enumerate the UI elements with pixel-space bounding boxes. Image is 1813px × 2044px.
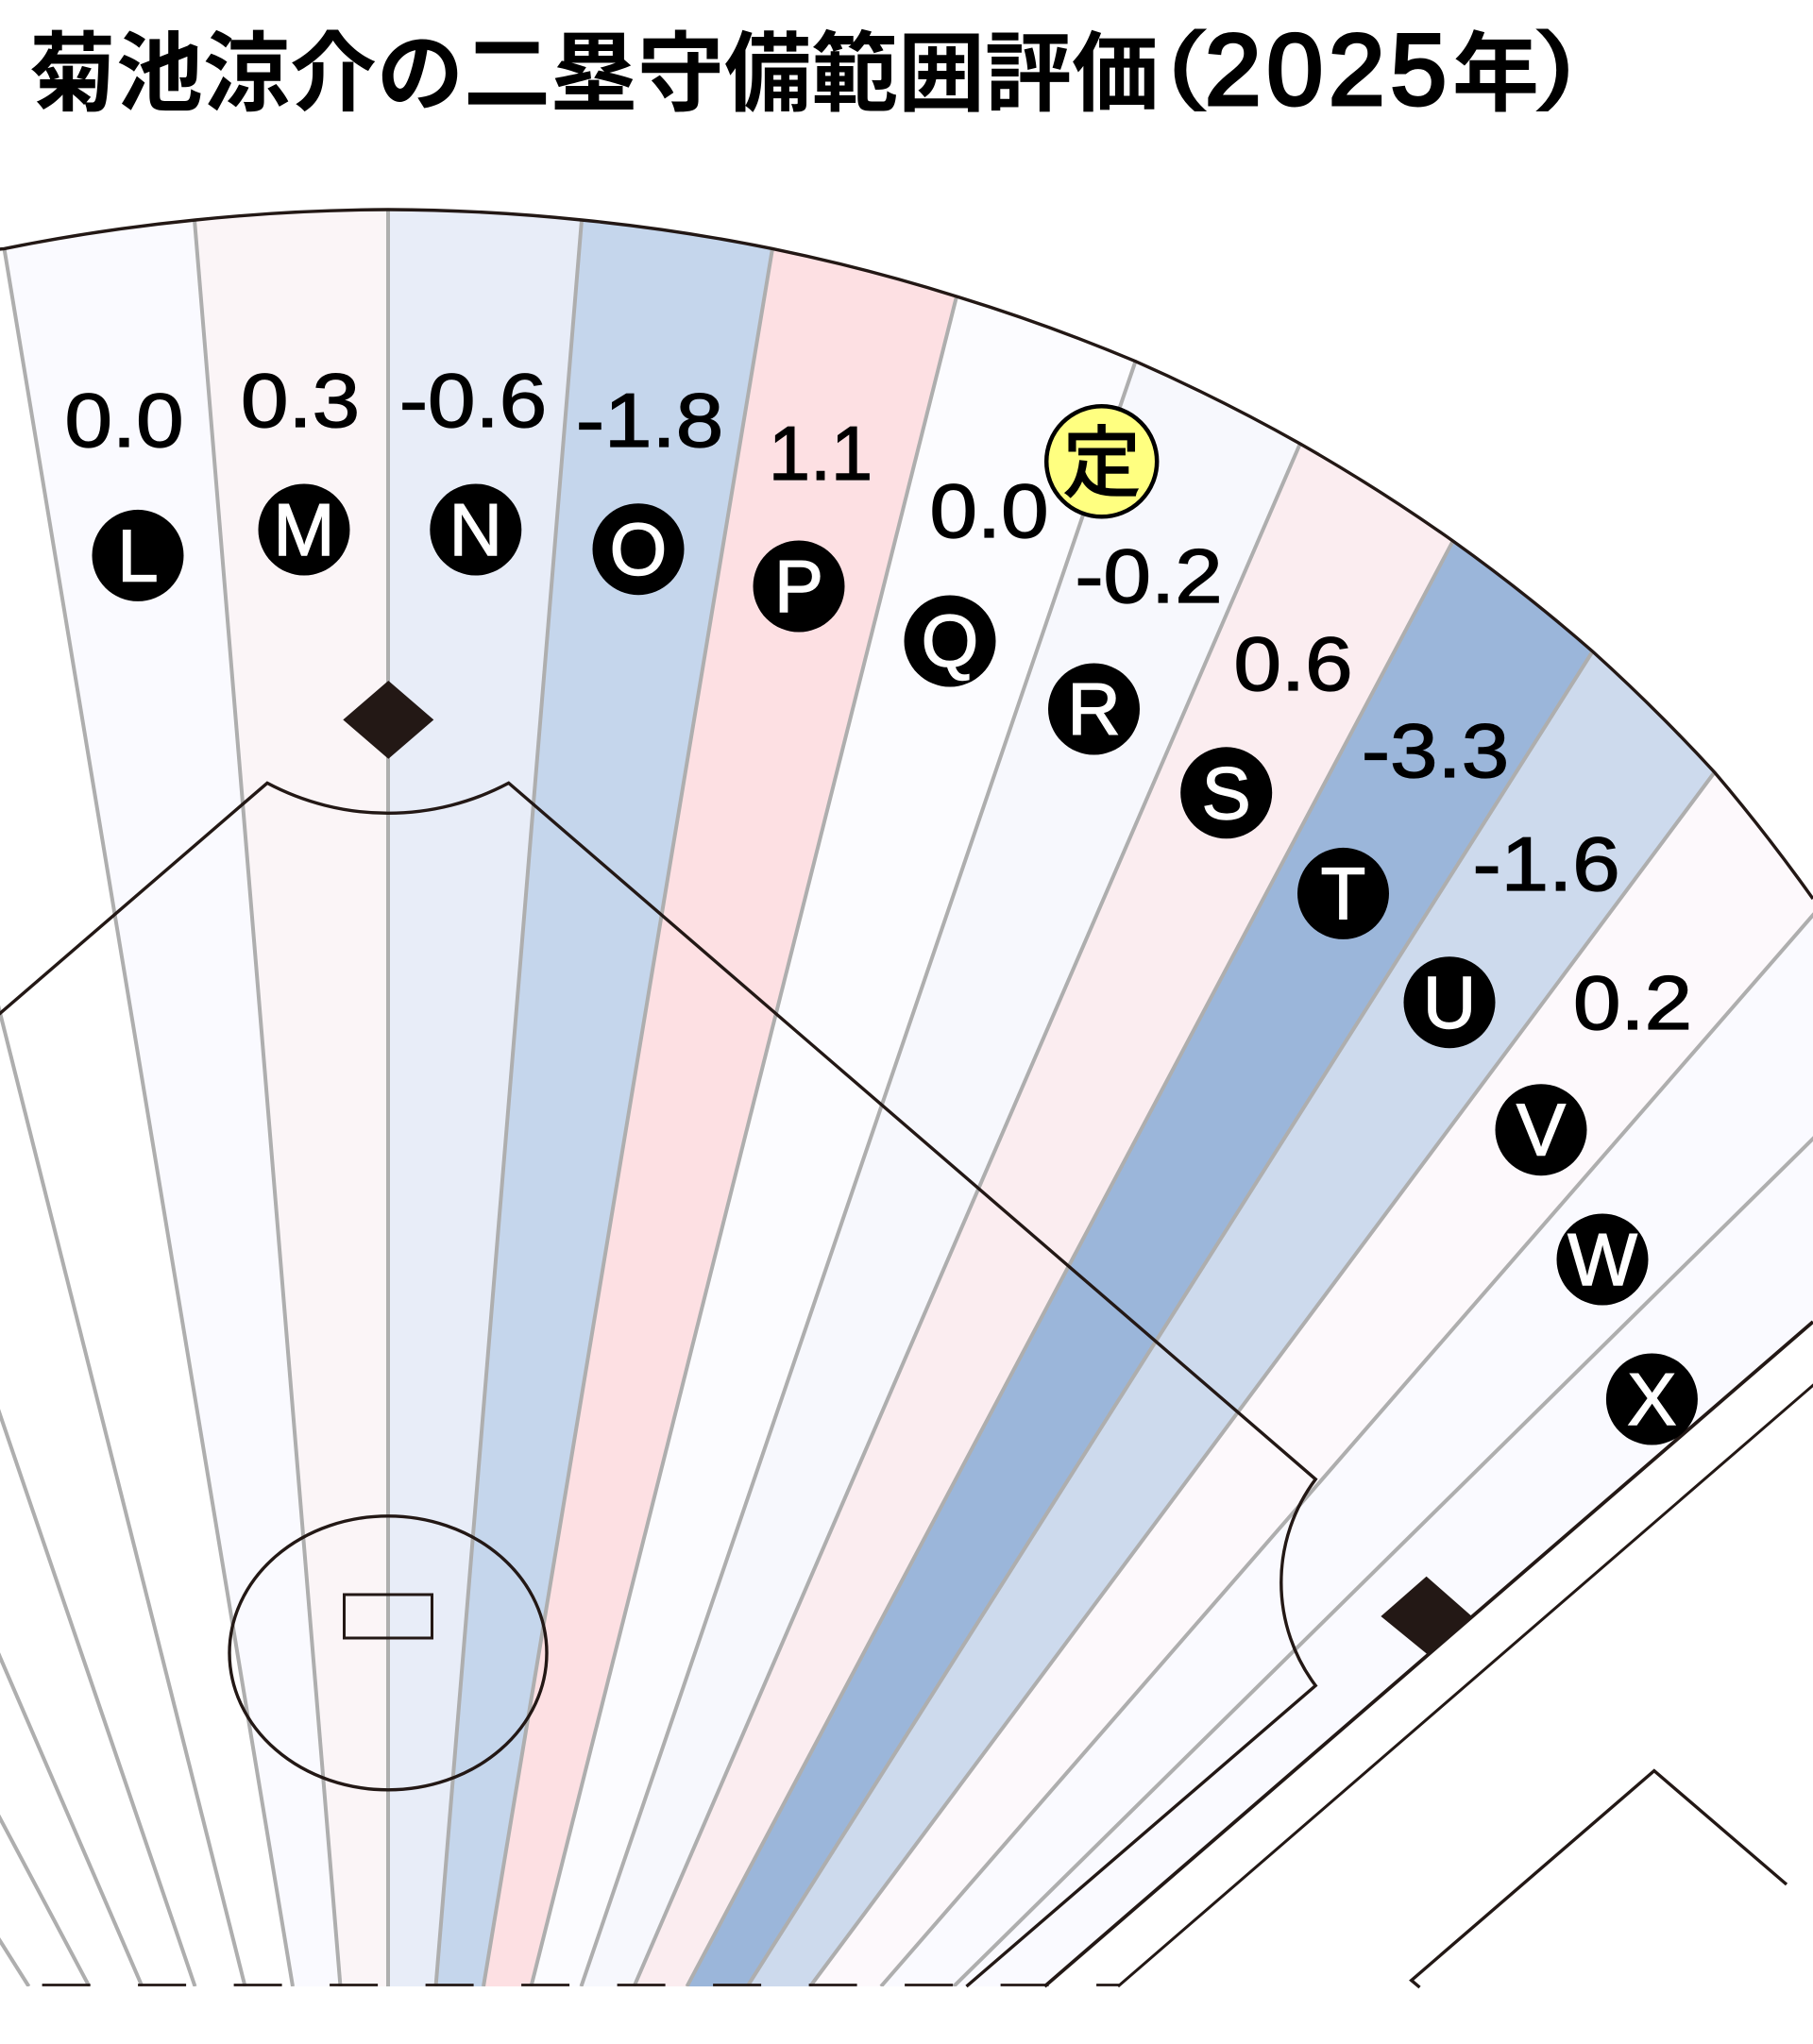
title [29,13,1574,127]
title: 菊池涼介の二塁守備範囲評価 [29,26,1159,123]
badge X [1606,1354,1698,1444]
zone T fill [689,544,1590,1986]
badge P [754,540,844,633]
right field bag marker [1381,1577,1472,1656]
zone M fill [196,211,386,1986]
badge M [259,483,349,576]
zone N value: -0.6 [399,358,547,444]
zone S fill [637,447,1450,1986]
zone N fill [390,211,580,1986]
badge Q: Q [922,600,978,683]
zone R value: -0.2 [1075,533,1223,619]
badge O: O [610,508,667,591]
badge V: V [1516,1089,1566,1172]
zone P fill [485,251,954,1986]
badge N: N [449,488,502,571]
badge P: P [774,545,823,628]
zone T value: -3.3 [1362,708,1509,794]
badge N [430,483,521,576]
zone O value: -1.8 [576,378,723,464]
zone L value: 0.0 [64,378,184,464]
title: ) [1537,15,1574,111]
outfield fence arc [0,210,1813,899]
badge X: X [1627,1358,1676,1441]
second base marker [343,681,433,759]
badge V [1496,1084,1586,1175]
outer foul line [1118,1381,1813,1986]
zone U fill [750,654,1713,1986]
title: 2025 [1205,13,1452,127]
zone X fill [954,94,1813,1986]
zone V fill [810,94,1813,1986]
badge W: W [1567,1218,1637,1301]
zone W fill [881,94,1813,1986]
badge U [1403,956,1496,1048]
zone U value: -1.6 [1472,821,1620,907]
badge S [1180,747,1272,838]
badge L: L [117,514,159,597]
zone S value: 0.6 [1233,621,1353,707]
zone O fill [438,222,771,1986]
zone M value: 0.3 [241,358,360,444]
fan of coloured range zones L to X [196,211,1713,1986]
badge O [593,503,684,595]
bottom dashed crop line [42,1984,1119,1986]
zone R fill [582,94,1450,1986]
stands corner outline [1412,1771,1787,1987]
badge R [1048,663,1140,755]
badge T: T [1321,852,1365,935]
foul line [1044,1322,1813,1986]
title: ( [1169,15,1205,111]
zone Q value: 0.0 [929,468,1049,554]
badge S: S [1202,752,1251,835]
zone Q fill [531,94,1227,1986]
zone V value: 0.2 [1573,960,1692,1046]
badge Q [905,595,995,687]
badge T [1297,848,1389,939]
zone P value: 1.1 [769,410,873,496]
infield outline [0,783,1315,1986]
badge M: M [274,488,334,571]
badge U: U [1423,961,1476,1044]
regular position badge: 定 [1063,421,1141,507]
regular position badge [1046,406,1157,516]
badge W [1556,1214,1649,1305]
zone L fill [0,94,341,1986]
badge R: R [1067,667,1121,751]
pitcher's mound [229,1516,547,1790]
pitcher's plate [344,1595,432,1638]
badge L [93,510,183,601]
title: 年 [1452,26,1539,123]
